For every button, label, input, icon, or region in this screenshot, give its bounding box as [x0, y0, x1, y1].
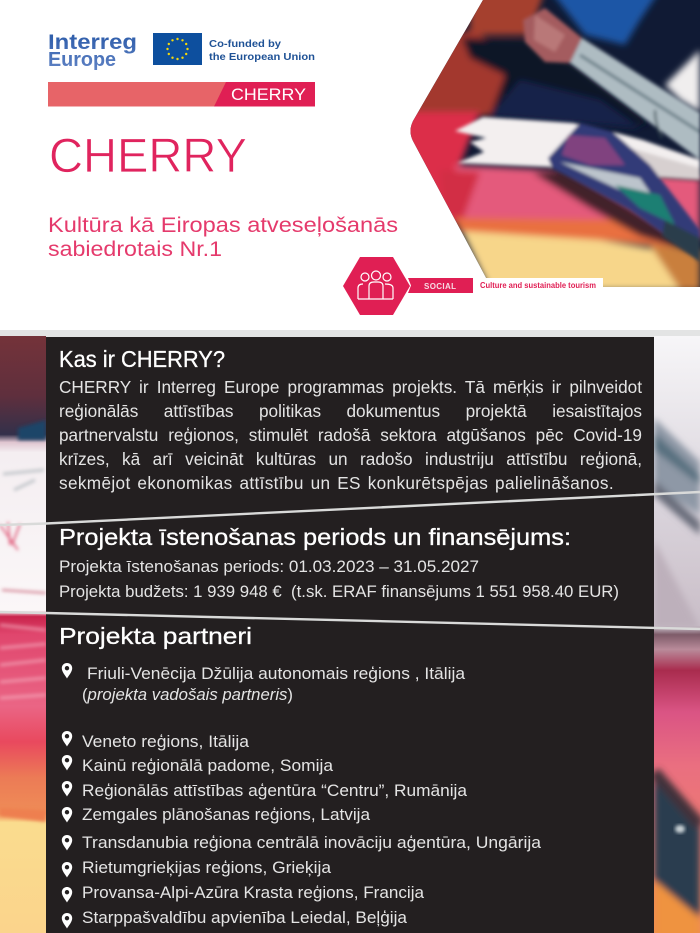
label: SOCIAL: [408, 278, 473, 293]
dark shadow: [462, 38, 650, 125]
text block: what is CHERRY: CHERRY ir Interreg Europe programmas projekts. Tā mērķis ir pilnveidot: [59, 377, 642, 397]
logo: Interreg Europe: [48, 31, 137, 71]
heading: period and funding: Projekta īstenošanas periods un finansējums:: [59, 524, 571, 550]
partner: Veneto: Veneto reģions, Itālija: [82, 733, 250, 751]
partner: Transdanubia: Transdanubia reģiona centrālā inovāciju aģentūra, Ungārija: [82, 834, 542, 852]
partner: Kainuu: Kainū reģionālā padome, Somija: [82, 757, 334, 775]
section: period and funding: [59, 524, 619, 601]
partner: Zemgale: Zemgales plānošanas reģions, Latvija: [82, 806, 371, 824]
logo: Interreg Europe: Interreg: [48, 31, 137, 54]
image: paintbrush and palette knife: [400, 0, 700, 290]
subtitle: [48, 214, 398, 261]
subtitle: sabiedrotais Nr.1: [48, 238, 222, 261]
text: co-funded by the European Union: Co-funded by: [209, 38, 281, 50]
text block: what is CHERRY: reģionālās attīstības politikas dokumentus projektā iesaistītajos: [59, 401, 642, 421]
section: project partners: [59, 623, 542, 927]
banner: CHERRY bar: CHERRY: [231, 86, 306, 104]
red-brown upper left: [470, 0, 545, 35]
cream wood: [462, 231, 700, 290]
text: co-funded by the European Union: [209, 38, 315, 63]
text block: what is CHERRY: partnervalstu reģionos, stimulēt radošā sektora atgūšanos pēc Covid-19: [59, 425, 642, 445]
text block: what is CHERRY: sekmējot ekonomikas attīstību un ES konkurētspējas palielināšanos.: [59, 473, 614, 493]
logo: Interreg Europe: Europe: [48, 49, 116, 71]
brush head: [523, 8, 582, 63]
partner: Leiedal: Starppašvaldību apvienība Leiedal, Beļģija: [82, 909, 408, 927]
label: Culture and sustainable tourism: Culture and sustainable tourism: [480, 281, 596, 290]
heading: Kas ir CHERRY?: Kas ir CHERRY?: [59, 346, 225, 372]
pink paint: [455, 165, 700, 240]
orange strip: [455, 218, 690, 250]
banner: CHERRY bar: [48, 82, 315, 106]
icons: location pins: [62, 663, 72, 928]
white cloth: [665, 50, 700, 112]
icon: social hexagon with people: [343, 257, 410, 315]
highlight spot: [675, 825, 685, 833]
text block: what is CHERRY: krīzes, kā arī veicināt kultūras un radošo industriju attīstību reģionā,: [59, 449, 642, 469]
partner: Friuli: Friuli-Venēcija Džūlija autonomais reģions , Itālija: [87, 665, 466, 683]
text: co-funded by the European Union: the European Union: [209, 51, 315, 63]
logo: EU flag: [153, 33, 202, 65]
subtitle: Kultūra kā Eiropas atveseļošanās: [48, 214, 398, 237]
panel: header logos: [48, 31, 315, 71]
panel: dark information panel: [46, 337, 654, 933]
text: period: Projekta īstenošanas periods: 01.03.2023 – 31.05.2027: [59, 558, 479, 576]
text block: what is CHERRY: [59, 377, 642, 493]
palette knife blade: [546, 122, 700, 239]
title: CHERRY: [49, 130, 247, 183]
shadow under knife: [533, 170, 690, 252]
ferrule: [570, 38, 700, 160]
partner: Western Greece: Rietumgrieķijas reģions, Grieķija: [82, 859, 332, 877]
partner note: lead partner: (projekta vadošais partneris): [82, 686, 293, 704]
label: SOCIAL: SOCIAL: [424, 282, 456, 291]
red lower left: [400, 112, 480, 225]
partner: Centru: Reģionālās attīstības aģentūra “Centru”, Rumānija: [82, 782, 468, 800]
heading: project partners: Projekta partneri: [59, 623, 252, 649]
image strip: left painted edge: [0, 336, 46, 933]
partner: Provence: Provansa-Alpi-Azūra Krasta reģions, Francija: [82, 884, 425, 902]
white paint band: [455, 117, 700, 180]
blue tube: [550, 0, 660, 45]
label: Culture and sustainable tourism: [473, 278, 603, 295]
image strip: right painted edge: [654, 336, 700, 933]
text: budget: Projekta budžets: 1 939 948 € (t.sk. ERAF finansējums 1 551 958.40 EUR): [59, 583, 619, 601]
